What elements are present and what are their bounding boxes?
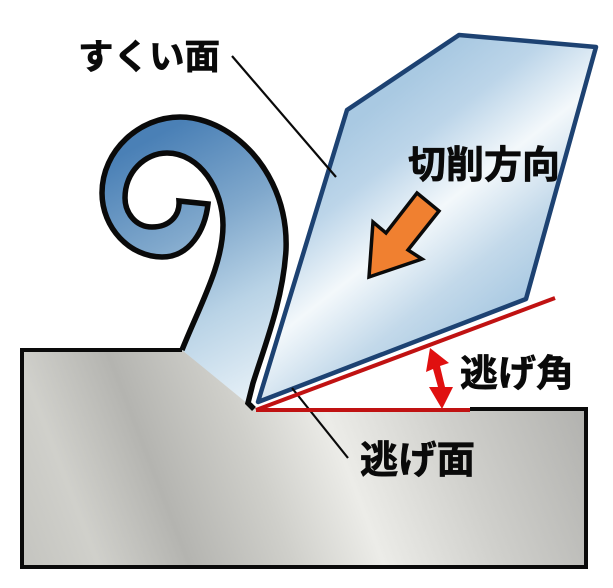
chip [102, 117, 286, 409]
rake face leader line [232, 56, 336, 177]
cutting direction arrow [369, 193, 439, 277]
label: flank face: 逃げ面 [360, 440, 475, 482]
label: clearance angle: 逃げ角 [460, 353, 574, 394]
label: cutting direction: 切削方向 [408, 145, 560, 187]
clearance angle double arrow [426, 348, 453, 409]
workpiece [22, 350, 586, 567]
flank face leader line [292, 388, 348, 458]
clearance angle red lines [256, 298, 555, 410]
label: rake face: すくい面 [78, 38, 220, 77]
cutting tool [258, 35, 596, 402]
